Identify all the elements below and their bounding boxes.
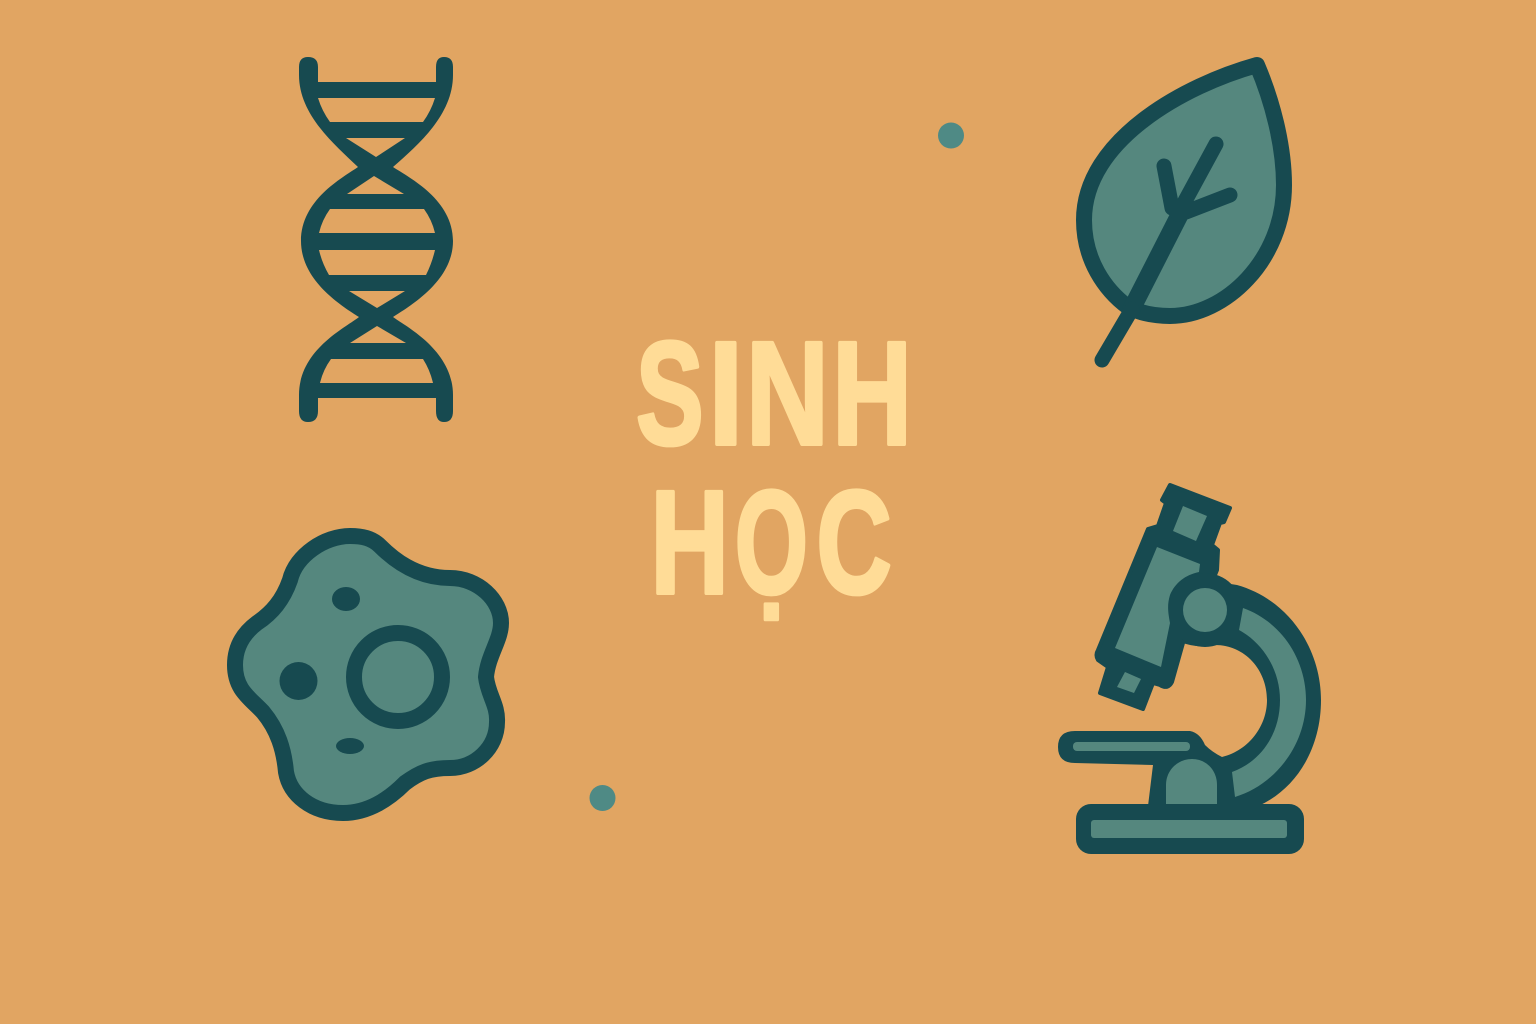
icon: DNA double helix: [299, 57, 453, 422]
title: H: [832, 310, 912, 476]
decorative dot bottom: [590, 785, 616, 811]
icon: leaf: [1084, 65, 1284, 360]
decorative dot top: [938, 122, 964, 148]
title: I: [708, 311, 743, 475]
title: C: [816, 462, 892, 625]
title: Ọ: [735, 461, 808, 625]
title: N: [746, 311, 829, 475]
title: S: [636, 311, 704, 475]
title: H: [650, 461, 729, 625]
icon: microscope: [1058, 485, 1321, 854]
title: [636, 310, 912, 625]
icon: cell: [235, 536, 501, 813]
